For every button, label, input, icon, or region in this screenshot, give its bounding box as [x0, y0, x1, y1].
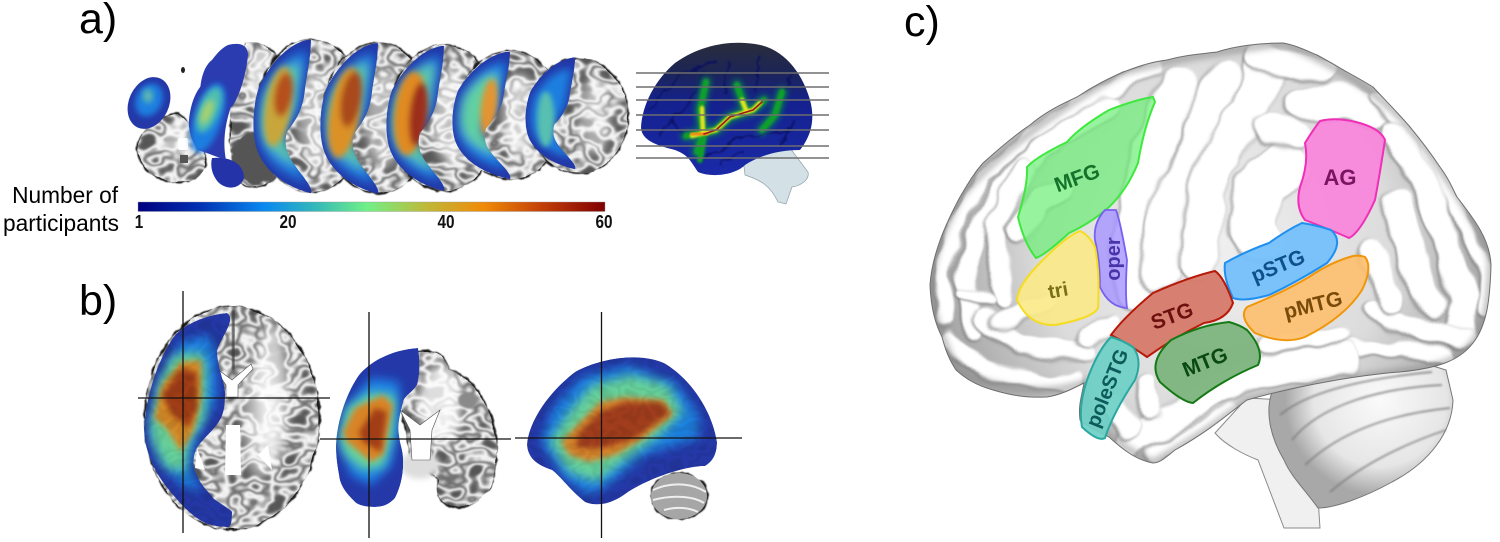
label AG: AG — [1324, 165, 1356, 190]
ticks — [135, 212, 613, 232]
ticks: 20 — [279, 212, 297, 232]
ventricles — [213, 364, 253, 397]
panel a: axial lesion overlap slices — [119, 39, 629, 194]
slice lines — [636, 73, 829, 158]
heat — [527, 357, 717, 504]
slice 4 — [320, 41, 413, 196]
legend title: participants — [3, 210, 119, 236]
grey brain — [400, 351, 497, 508]
panel c: 3D brain with labelled regions — [920, 30, 1500, 528]
crosshair — [320, 312, 511, 538]
panel b: coronal view — [320, 312, 511, 538]
label poleSTG: poleSTG — [1082, 346, 1134, 431]
rim shading — [930, 43, 1491, 463]
panel b: axial view — [138, 291, 330, 533]
region pSTG — [1225, 223, 1337, 299]
slice 2 — [184, 42, 292, 188]
region AG — [1298, 119, 1385, 238]
crosshair — [138, 291, 330, 533]
label pMTG: pMTG — [1281, 287, 1345, 324]
label STG: STG — [1148, 298, 1196, 335]
label MTG: MTG — [1179, 343, 1231, 382]
label pSTG: pSTG — [1248, 245, 1308, 288]
region STG — [1111, 271, 1233, 357]
hemisphere surface — [920, 30, 1500, 470]
panel a: 3D brain render with slice lines — [636, 43, 829, 204]
crosshair — [515, 312, 742, 538]
heat — [336, 348, 419, 507]
slice 3 — [253, 38, 346, 194]
slice 6 — [452, 48, 548, 181]
sulcal network — [686, 82, 782, 160]
slice 1: temporal pole heat blob — [119, 70, 179, 136]
heat — [144, 313, 232, 527]
region pMTG — [1244, 256, 1368, 340]
cerebellum — [742, 148, 808, 204]
legend title: Number of — [12, 182, 119, 208]
region tri — [1017, 231, 1099, 325]
cerebellum — [650, 472, 708, 520]
region oper — [1095, 210, 1127, 308]
gradient bar — [138, 202, 605, 212]
region MTG — [1155, 322, 1260, 403]
gyral folds — [650, 55, 795, 165]
cerebellum — [1269, 362, 1453, 508]
ticks: 60 — [595, 212, 613, 232]
panel b: sagittal view — [515, 312, 742, 538]
slice 5 — [386, 43, 483, 194]
region MFG — [1018, 97, 1155, 258]
label tri: tri — [1046, 278, 1070, 304]
gyri — [942, 58, 1485, 455]
ticks: 1 — [135, 212, 144, 232]
brainstem and pons — [1215, 398, 1320, 528]
slice 7 — [526, 58, 629, 174]
hemisphere — [641, 43, 812, 175]
label MFG: MFG — [1051, 160, 1103, 197]
ticks: 40 — [437, 212, 455, 232]
hemisphere outline — [930, 43, 1491, 463]
panel label: b: b) — [79, 277, 117, 325]
region poleSTG — [1081, 337, 1139, 439]
colorbar legend — [3, 182, 613, 236]
slice: cerebellum — [136, 67, 207, 183]
grey brain — [144, 306, 320, 530]
label oper: oper — [1103, 237, 1125, 281]
